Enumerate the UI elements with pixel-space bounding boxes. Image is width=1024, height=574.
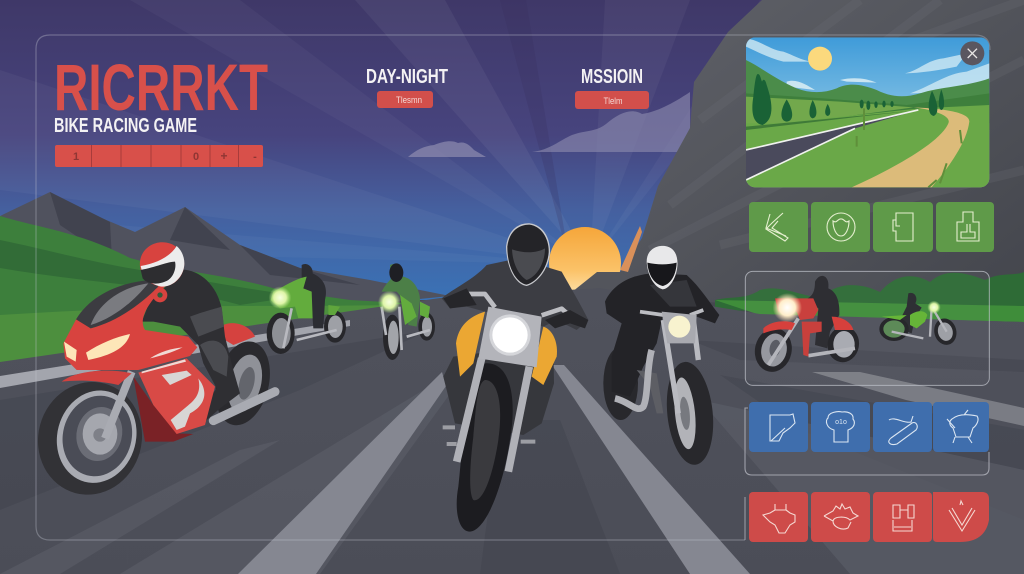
windshield glass bbox=[91, 283, 148, 325]
icon: pot bbox=[933, 402, 989, 452]
icon: tag bbox=[749, 402, 808, 452]
handlebar bbox=[467, 294, 570, 316]
mission label bbox=[575, 66, 649, 109]
helmet bbox=[506, 223, 550, 286]
front fork bbox=[105, 372, 132, 438]
road shaded bands bbox=[0, 330, 1024, 574]
bracket outline bbox=[745, 408, 989, 475]
distant centre ridge bbox=[560, 272, 645, 296]
lower fairing bbox=[138, 358, 215, 434]
left headlight bbox=[64, 342, 77, 362]
engine bbox=[637, 370, 663, 413]
right light grass bbox=[715, 300, 1024, 322]
front wheel bbox=[25, 370, 155, 506]
sun rays bbox=[0, 0, 800, 265]
exhaust bbox=[213, 392, 275, 421]
bike: green racer left bbox=[267, 264, 346, 354]
panel: red cruiser bbox=[751, 276, 862, 375]
rider jacket bbox=[442, 260, 588, 330]
rear wheel bbox=[603, 347, 638, 420]
title block bbox=[54, 50, 268, 137]
fairing flash bbox=[162, 371, 204, 430]
left grass hills bbox=[0, 216, 420, 372]
green icon row bbox=[749, 202, 994, 252]
right rock wall bbox=[600, 0, 1024, 320]
icon: bull head bbox=[749, 492, 808, 542]
preview map panel bbox=[746, 37, 989, 187]
front mudguard bbox=[62, 371, 132, 385]
day-night label: DAY-NIGHT bbox=[366, 66, 448, 88]
mirror centre bbox=[157, 292, 163, 298]
icon: round emblem bbox=[811, 202, 870, 252]
game logo: RICRRKT bbox=[54, 50, 268, 124]
yellow tank left bbox=[456, 312, 485, 377]
far mountains left bbox=[0, 192, 450, 340]
foot pegs bbox=[443, 427, 535, 444]
headlight bbox=[668, 316, 690, 338]
cloud: right bbox=[532, 92, 690, 152]
icon: burst bbox=[811, 492, 870, 542]
rear seat cowl bbox=[223, 323, 255, 345]
orange ridge bbox=[620, 226, 642, 272]
dark central ray bbox=[500, 0, 570, 265]
sun bbox=[549, 227, 621, 299]
rider jacket bbox=[142, 270, 240, 422]
day-night label: Tlesmn bbox=[396, 95, 422, 105]
tyre bbox=[457, 363, 513, 532]
red score bar: + bbox=[220, 149, 228, 163]
exhaust pipe bbox=[615, 350, 652, 409]
front wheel bbox=[662, 360, 718, 467]
headlight lens bbox=[492, 317, 528, 353]
headlight plate bbox=[478, 307, 542, 367]
icon: chevron glyph bbox=[949, 501, 975, 531]
icon: gate bbox=[873, 492, 932, 542]
yellow tank right bbox=[532, 327, 557, 385]
rider legs shade bbox=[443, 343, 554, 435]
left lane line bbox=[0, 320, 350, 388]
bike body underside bbox=[133, 377, 193, 442]
headlight bbox=[489, 314, 531, 356]
far green bikes bbox=[267, 263, 435, 360]
icon: crown bbox=[811, 402, 870, 452]
day-night label bbox=[366, 66, 448, 108]
centre lane stripe bbox=[238, 372, 446, 574]
headlight housing bbox=[662, 312, 697, 343]
right hedge bbox=[715, 272, 1024, 316]
icon: crown: o1o bbox=[835, 419, 847, 426]
mirror stalk bbox=[153, 288, 167, 302]
tyre tread bbox=[470, 380, 500, 500]
large red sport bike with rider bbox=[25, 242, 278, 506]
fairing highlight bbox=[142, 347, 186, 373]
helmet bbox=[647, 246, 678, 289]
panel: green racer bbox=[879, 293, 959, 347]
icon: tool bbox=[873, 402, 932, 452]
red icon row bbox=[745, 492, 989, 542]
mission label: Tlelm bbox=[604, 96, 622, 106]
cloud: left bbox=[408, 141, 486, 157]
light grass bbox=[0, 305, 420, 372]
left fork bbox=[457, 358, 482, 462]
right lane stripe bbox=[552, 365, 750, 574]
blue icon row bbox=[745, 402, 989, 475]
icon: wrench bbox=[749, 202, 808, 252]
bike: green racer centre bbox=[378, 263, 435, 360]
windshield bbox=[76, 280, 158, 328]
icon: door bbox=[873, 202, 933, 252]
forks bbox=[663, 320, 698, 413]
red score bar: - bbox=[253, 151, 257, 163]
bike photo panel bbox=[745, 271, 989, 385]
mountain shading bbox=[50, 192, 360, 285]
road surface bbox=[0, 288, 1024, 574]
right fork bbox=[508, 367, 529, 472]
handlebar bbox=[640, 310, 703, 315]
subtitle: BIKE RACING GAME bbox=[54, 115, 197, 137]
jacket highlights bbox=[190, 307, 228, 377]
red score bar: 1 bbox=[73, 151, 79, 163]
dark grass band bbox=[0, 240, 300, 305]
gloves bbox=[443, 288, 588, 328]
icon: chevron bbox=[933, 492, 989, 542]
rear wheel bbox=[207, 336, 278, 431]
mission label: MSSIOIN bbox=[581, 66, 643, 88]
centre yellow bike with rider bbox=[442, 223, 588, 532]
rider body bbox=[605, 273, 719, 397]
upper fairing bbox=[63, 285, 197, 370]
sky background bbox=[0, 0, 1024, 300]
icon: seat bbox=[936, 202, 994, 252]
helmet bbox=[140, 242, 184, 287]
road lighter band bbox=[0, 380, 1024, 574]
far right lane stripe bbox=[812, 372, 1024, 426]
jacket highlight bbox=[650, 280, 697, 307]
right headlight bbox=[86, 334, 130, 360]
rock strata bbox=[650, 0, 1024, 250]
right chrome bike with rider bbox=[603, 246, 719, 467]
red score bar: 0 bbox=[193, 151, 199, 163]
red score bar bbox=[55, 145, 263, 167]
